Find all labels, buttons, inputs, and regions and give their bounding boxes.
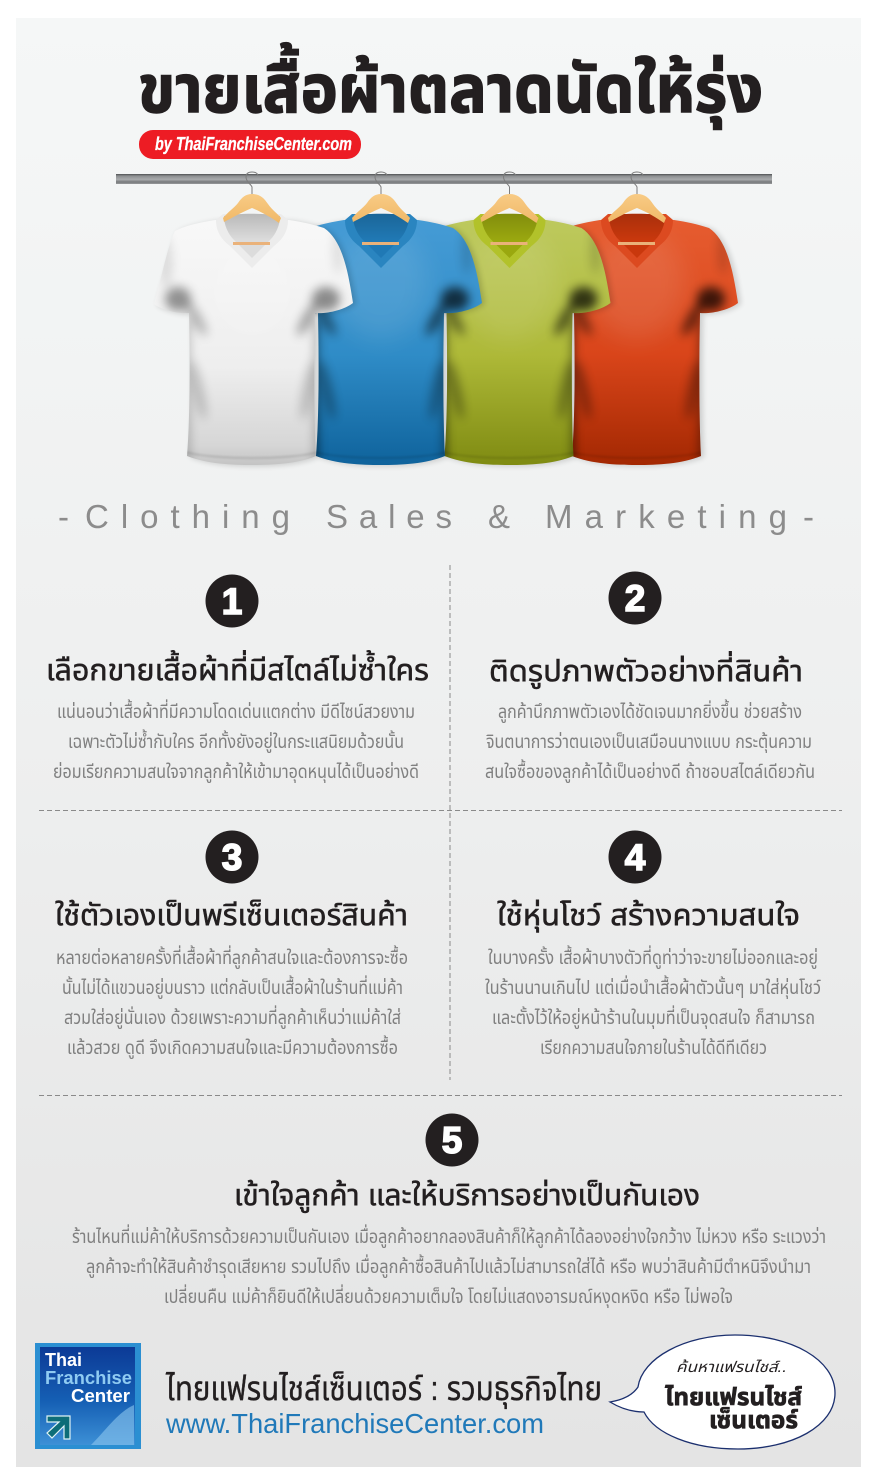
subtitle: Clothing [85, 498, 290, 535]
section 1 [46, 574, 429, 784]
body 1: เฉพาะตัวไม่ซ้ำกับใคร อีกทั้งยังอยู่ในกระแสนิยมด้วยนั้น [68, 729, 404, 754]
clothes rail [116, 174, 772, 184]
body 2 [485, 699, 815, 784]
number badge 4: 4 [625, 837, 646, 878]
number badge 1: 1 [222, 581, 242, 622]
speech bubble [610, 1335, 835, 1449]
heading 3: ใช้ตัวเองเป็นพรีเซ็นเตอร์สินค้า [55, 899, 408, 932]
body 3: สวมใส่อยู่นั่นเอง ด้วยเพราะความที่ลูกค้าเห็นว่าแม่ค้าใส่ [64, 1005, 401, 1030]
logo: Thai Franchise Center: Thai [45, 1350, 82, 1370]
icon: arrow [47, 1416, 70, 1439]
body 4: ในร้านนานเกินไป แต่เมื่อนำเสื้อผ้าตัวนั้นๆ มาใส่หุ่นโชว์ [485, 975, 821, 999]
subtitle: - [803, 498, 814, 535]
subtitle: Marketing [545, 498, 787, 535]
title: ขายเสื้อผ้าตลาดนัดให้รุ่ง [138, 42, 763, 130]
number badge 2: 2 [625, 578, 645, 619]
footer tagline: ไทยแฟรนไชส์เซ็นเตอร์ : รวมธุรกิจไทย [165, 1370, 602, 1409]
body 2: สนใจซื้อของลูกค้าได้เป็นอย่างดี ถ้าชอบสไตล์เดียวกัน [485, 759, 815, 784]
number badge 5 [426, 1114, 478, 1166]
body 3: นั้นไม่ได้แขวนอยู่บนราว แต่กลับเป็นเสื้อผ้าในร้านที่แม่ค้า [62, 975, 403, 1000]
logo: Thai Franchise Center: Center [71, 1386, 130, 1406]
byline badge: by ThaiFranchiseCenter.com [155, 134, 352, 154]
blue shirt [283, 172, 485, 466]
body 4: ในบางครั้ง เสื้อผ้าบางตัวที่ดูท่าว่าจะขายไม่ออกและอยู่ [488, 945, 818, 970]
body 1: ย่อมเรียกความสนใจจากลูกค้าให้เข้ามาอุดหนุนได้เป็นอย่างดี [53, 761, 419, 784]
body 5 [72, 1224, 826, 1308]
body 1 [53, 699, 419, 784]
logo: Thai Franchise Center: Franchise [45, 1368, 132, 1388]
body 4: เรียกความสนใจภายในร้านได้ดีทีเดียว [540, 1037, 767, 1058]
body 4: และตั้งไว้ให้อยู่หน้าร้านในมุมที่เป็นจุดสนใจ ก็สามารถ [492, 1005, 815, 1030]
section 4 [485, 830, 821, 1058]
heading 1: เลือกขายเสื้อผ้าที่มีสไตล์ไม่ซ้ำใคร [46, 650, 429, 687]
green shirt [412, 172, 614, 466]
body 2: จินตนาการว่าตนเองเป็นเสมือนนางแบบ กระตุ้นความ [486, 731, 812, 753]
section 5 [72, 1114, 826, 1308]
number badge 2 [608, 572, 662, 624]
speech bubble: เซ็นเตอร์ [709, 1407, 798, 1434]
body 5: เปลี่ยนคืน แม่ค้าก็ยินดีให้เปลี่ยนด้วยความเต็มใจ โดยไม่แสดงอารมณ์หงุดหงิด หรือ ไม่พอใจ [164, 1284, 733, 1308]
number badge 5: 5 [442, 1120, 462, 1161]
section 3 [55, 830, 408, 1060]
subtitle: & [488, 498, 510, 535]
number badge 1 [206, 574, 258, 628]
body 2: ลูกค้านึกภาพตัวเองได้ชัดเจนมากยิ่งขึ้น ช่วยสร้าง [498, 699, 802, 724]
body 3 [56, 945, 408, 1060]
number badge 3: 3 [222, 837, 242, 878]
logo: Thai Franchise Center [35, 1343, 141, 1449]
footer url: www.ThaiFranchiseCenter.com [165, 1408, 544, 1439]
speech bubble: ค้นหาแฟรนไชส์.. [676, 1359, 787, 1376]
section 2 [485, 572, 815, 784]
speech bubble: ไทยแฟรนไชส์ [665, 1384, 802, 1411]
t-shirts on hangers [154, 172, 741, 466]
white shirt [154, 172, 356, 466]
number badge 4 [608, 830, 662, 884]
number badge 3 [206, 830, 258, 884]
heading 5: เข้าใจลูกค้า และให้บริการอย่างเป็นกันเอง [234, 1179, 700, 1213]
subtitle [58, 498, 814, 535]
body 4 [485, 945, 821, 1058]
body 3: แล้วสวย ดูดี จึงเกิดความสนใจและมีความต้องการซื้อ [67, 1035, 398, 1060]
heading 2: ติดรูปภาพตัวอย่างที่สินค้า [489, 651, 803, 689]
body 3: หลายต่อหลายครั้งที่เสื้อผ้าที่ลูกค้าสนใจและต้องการจะซื้อ [56, 945, 408, 970]
byline badge [139, 130, 361, 159]
subtitle: Sales [326, 498, 452, 535]
subtitle: - [58, 498, 69, 535]
heading 4: ใช้หุ่นโชว์ สร้างความสนใจ [497, 899, 800, 933]
orange shirt [539, 172, 741, 466]
body 1: แน่นอนว่าเสื้อผ้าที่มีความโดดเด่นแตกต่าง มีดีไซน์สวยงาม [57, 699, 415, 722]
